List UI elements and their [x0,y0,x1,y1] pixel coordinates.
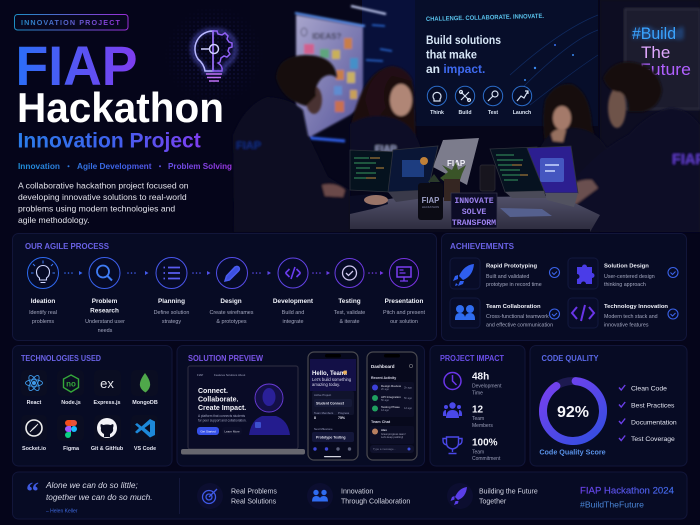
achievement tiles [450,258,598,328]
stats: Team [472,416,484,422]
phone mockup: dashboard: Testing Phase [381,405,400,409]
phone mockup: dashboard: Type a message... [373,447,396,451]
icon: mongodb [140,373,150,392]
tech labels: React [27,400,42,406]
text: real problems: Real Solutions [231,498,277,506]
phone mockup: dashboard: 1d ago [381,408,389,412]
phone mockup: dashboard: 1d ago [404,406,412,410]
step labels: our solution [390,319,418,325]
title [16,34,224,152]
step labels: Testing [338,298,361,305]
process arrows [64,271,383,275]
icon: vs code [135,419,155,438]
hero photo: team at work in dark room [233,0,700,232]
text: real problems: Real Problems [231,488,277,496]
tech labels: MongoDB [132,400,158,406]
icon: clock [444,372,461,390]
checklist: Test Coverage [631,436,675,443]
icon: target [197,483,223,509]
stats: Team [472,450,484,456]
tech tiles [21,370,158,441]
laptop mockup [181,366,305,454]
panel: project impact [430,346,525,466]
phone mockup: dashboard: Let's keep pushing! [381,435,404,439]
checklist: Clean Code [631,386,667,392]
event hashtag [580,486,675,510]
title: Hackathon [17,84,224,131]
icon: glowing lightbulb with gear [170,10,258,98]
neon sign: #Build [632,24,676,43]
icon: express: ex [100,376,114,391]
heading: achievements: ACHIEVEMENTS [450,242,514,251]
event hashtag: FIAP Hackathon 2024 [580,486,675,496]
desk sign: TRANSFORM [452,219,496,228]
tagline: Innovation [18,161,60,171]
phone mockup: dashboard: 5h ago [381,398,389,402]
panel: code quality [530,346,687,466]
cup [480,165,495,191]
quote [26,477,153,514]
title: Innovation Project [18,130,201,152]
presentation screen: Build solutions [426,33,501,47]
icon: team [455,305,475,320]
donut chart 92% [540,378,606,444]
person 2 [350,66,416,150]
heading: impact: PROJECT IMPACT [440,354,504,363]
person 4 [563,108,700,232]
achievement text: Rapid Prototyping [486,264,537,270]
step labels: Ideation [31,298,55,305]
stats: 100% [472,438,498,448]
phone mockup: dashboard: 2h ago [404,386,412,390]
laptops [350,138,578,207]
presentation screen: Launch [513,110,531,116]
laptop mockup: for peer support and collaboration. [198,418,247,422]
icon: react [26,374,42,392]
badge: innovation project [14,14,128,30]
plant [428,162,466,201]
phone mockup: home [308,352,358,460]
step labels: Planning [158,298,185,305]
intro paragraph [18,180,189,225]
checklist: Best Practices [631,402,675,410]
process circles [28,258,418,288]
icon: github [97,418,117,438]
stats: 48h [472,372,489,382]
presentation screen: Test [488,110,498,116]
icon: node.js: no [66,380,76,388]
text: future [479,488,538,506]
achievement text: innovative features [604,322,649,328]
panel: solution preview [177,346,424,466]
phone mockup: home: Let's build something [312,377,352,382]
text: innovation: Innovation [341,488,373,496]
phone mockup: dashboard: Great progress team! [381,432,406,436]
donut chart 92%: 92% [557,404,589,421]
intro paragraph: A collaborative hackathon project focused on [18,180,189,190]
step labels: Problem [92,298,118,305]
achievement text: Team Collaboration [486,304,541,310]
step labels: Build and [282,310,304,316]
quote: Alone we can do so little; [45,480,138,490]
chart caption: Code Quality Score [539,448,606,456]
achievement text: User-centered design [604,274,655,280]
step labels: strategy [162,319,181,325]
heading: solution preview: SOLUTION PREVIEW [188,354,264,363]
presentation screen: Think [430,110,444,116]
achievement text: prototype in record time [486,282,542,288]
phone mockup: dashboard: 2h ago [381,387,389,391]
presentation screen: that make [426,48,477,62]
laptop mockup: Connect. [198,388,228,395]
step labels: problems [32,319,54,325]
step labels [29,298,425,334]
icon: team [307,483,333,509]
arm of person 2 [350,194,388,214]
presentation screen: CHALLENGE. COLLABORATE. INNOVATE. [426,13,544,23]
step labels: Understand user [85,319,125,325]
checklist: Documentation [631,420,677,426]
icon: trophy [443,437,462,454]
phone mockup: dashboard: Team Chat [371,420,391,424]
laptops: FIAP [447,159,466,168]
phone mockup: home: Student Connect [316,402,345,406]
checklist [619,385,677,443]
mug: FIAP: FIAP [422,196,439,205]
desk sign: SOLVE [462,208,486,217]
tech labels: VS Code [134,446,156,452]
tagline [18,161,232,171]
panel: achievements [442,234,686,340]
achievement text: Cross-functional teamwork [486,314,549,320]
process icons [31,260,411,282]
step labels: Design [220,298,242,305]
text: innovation: Through Collaboration [341,498,410,506]
phone mockup: home: Team Members [314,411,334,415]
neon sign: Future [640,60,691,79]
event hashtag: #BuildTheFuture [580,500,645,510]
phone mockup: home: amazing today. [312,382,340,387]
tagline: Agile Development [77,161,152,171]
phone mockup: dashboard: 5h ago [404,396,412,400]
achievement text: Built and validated [486,274,529,280]
phone mockup: home: 75% [338,416,346,420]
step labels: Pitch and present [383,310,425,316]
step labels: Presentation [385,298,423,305]
step labels: Development [273,298,314,305]
phone mockup: home: Hello, Team! [312,371,347,377]
presentation screen: an impact. [426,62,485,76]
heading: code quality: CODE QUALITY [542,354,599,363]
panel: technologies used [12,346,172,466]
icon: node.js [64,375,78,392]
tech labels: Node.js [61,400,81,406]
achievement text: Modern tech stack and [604,314,658,320]
laptop mockup: Learn More [224,430,240,434]
heading: process: OUR AGILE PROCESS [25,242,109,251]
mug: FIAP: HACKATHON [422,205,439,209]
step labels: & prototypes [216,319,247,325]
achievement text [486,264,668,328]
phone mockup: home: 8 [314,416,316,420]
text: real problems [231,488,277,506]
tech labels [22,400,158,452]
step labels: Identify real [29,310,57,316]
phone mockup: home: Active Project [314,393,331,397]
tech labels: Figma [63,446,80,452]
icon: figma [65,420,77,438]
quote: together we can do so much. [46,492,153,502]
step labels: Research [90,308,119,314]
tagline: Problem Solving [168,161,232,171]
step labels: integrate [283,319,303,325]
text: future: Building the Future [479,488,538,496]
text: innovation [341,488,410,506]
tech labels: Express.js [94,400,120,406]
step labels: & iterate [339,319,360,325]
hero photo: team at work in dark room: IDEAS? [312,32,341,41]
neon sign: #Build [632,24,684,43]
icon: people [443,402,462,418]
person 3 [543,84,600,160]
icon: code [572,305,594,321]
title: FIAP [16,34,138,97]
laptop mockup: Collaborate. [198,396,239,404]
phone mockup: dashboard: Dashboard [371,364,395,369]
hero photo: team at work in dark room: FIAP [236,140,261,152]
person 1 [233,97,350,232]
tech labels: Socket.io [22,446,47,452]
icon: socket.io [26,420,42,436]
stats: Development [472,384,502,390]
quote: – Helen Keller [46,508,78,514]
icon: rocket [453,264,474,286]
mug: FIAP [418,183,443,220]
text: future: Together [479,498,507,506]
laptop mockup: A platform that connects students [198,414,246,418]
badge: innovation project: INNOVATION PROJECT [21,18,121,27]
phone mockup: dashboard [367,352,417,460]
phone mockup: dashboard: Recent Activity [371,376,396,380]
phone mockup: dashboard: Design Review [381,384,402,388]
desk sign [451,193,497,228]
achievement text: and effective communication [486,322,553,328]
step labels: Define solution [154,310,189,316]
neon sign [632,24,691,79]
laptop mockup: Create Impact. [198,405,246,412]
intro paragraph: problems using modern technologies and [18,204,175,214]
achievement text: Technology Innovation [604,304,668,310]
phone mockup: home: Prototype Testing [316,436,346,440]
phone mockup: home: Next Milestone [314,427,333,431]
laptop mockup: FIAP [197,373,203,377]
intro paragraph: developing innovative solutions to real-world [18,192,187,202]
phone mockup: home: Progress [338,411,350,415]
presentation screen [415,0,598,126]
presentation screen: Build [459,110,471,116]
stats: Time [472,390,483,396]
phone mockup: dashboard: Alex [381,428,387,432]
achievement text: thinking approach [604,282,646,288]
icon: rocket [447,483,473,509]
laptop mockup: Get Started [200,430,216,434]
step labels: Test, validate [334,310,365,316]
intro paragraph: agile methodology. [18,215,90,225]
check marks [550,268,678,319]
neon sign: The [641,43,670,62]
tech labels: Git & GitHub [91,446,124,452]
phone mockup: dashboard: API Integration [381,395,401,399]
quote: “ [26,477,39,506]
desk sign: INNOVATE [454,197,494,206]
step labels: Create wireframes [209,310,254,316]
table [350,196,600,232]
achievement text: Solution Design [604,264,649,270]
stats: Members [472,423,493,429]
step labels: needs [98,328,113,334]
footer band [12,472,687,519]
hero photo: team at work in dark room: FIAP [375,144,397,155]
laptop mockup: Features Solutions About [214,373,245,377]
stats [472,372,502,462]
heading: technologies: TECHNOLOGIES USED [21,354,101,363]
panel: our agile process [12,234,436,340]
stats: Commitment [472,456,501,462]
stats: 12 [472,404,484,416]
icon: puzzle [577,264,594,284]
